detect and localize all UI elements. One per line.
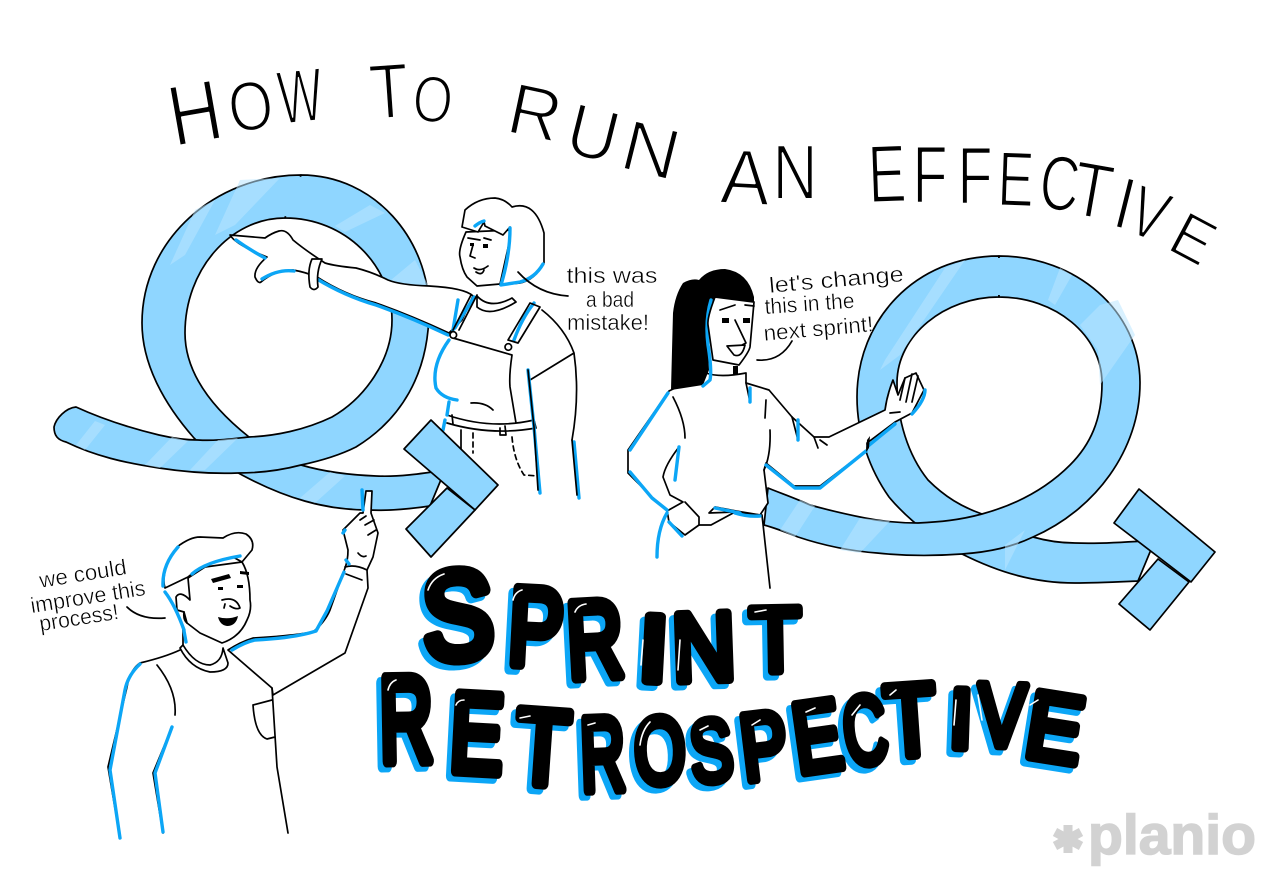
strap buttons <box>450 332 512 350</box>
arrow head upper <box>1114 489 1215 582</box>
icon: asterisk <box>1055 825 1081 853</box>
ribbon highlights <box>780 260 1135 570</box>
bracelet <box>309 259 322 290</box>
hair shadow <box>475 221 543 285</box>
left arrow head <box>404 420 498 557</box>
title: how to run an effective: E <box>1158 198 1228 280</box>
word: retrospective: P <box>734 691 794 801</box>
heading gloss highlights <box>388 574 1038 745</box>
title: how to run an effective: F <box>957 130 993 221</box>
arrow head upper <box>404 420 498 510</box>
fingers <box>890 374 918 413</box>
title: how to run an effective: E <box>996 136 1036 224</box>
figure: woman with long black hair <box>628 269 925 588</box>
title: how to run an effective: F <box>912 129 948 220</box>
word: retrospective: R <box>578 696 627 814</box>
speech: let's change this in the next sprint <box>757 261 905 360</box>
heading: sprint retrospective <box>378 546 1091 814</box>
arrow head lower <box>1119 559 1189 630</box>
collar <box>180 645 228 672</box>
speech: this was a bad mistake: mistake! <box>567 310 649 335</box>
word: retrospective <box>378 652 1091 814</box>
word: sprint: T <box>749 588 802 691</box>
word: retrospective: O <box>632 698 687 805</box>
blue shadows <box>110 490 363 838</box>
body and arm <box>628 373 924 535</box>
figure: woman with overalls pointing <box>230 198 580 498</box>
face features <box>720 305 754 356</box>
head <box>176 562 251 643</box>
speech: we could improve this process: we could <box>36 554 128 593</box>
head <box>460 230 512 286</box>
hair <box>671 269 754 390</box>
body left <box>108 650 288 838</box>
word: retrospective: V <box>976 666 1028 767</box>
clothing lines <box>657 383 827 588</box>
speech: let's change this in the next sprint: let's change <box>768 261 905 298</box>
word: sprint: I <box>636 595 672 702</box>
title: how to run an effective: O <box>223 64 278 148</box>
word: retrospective: R <box>378 652 434 788</box>
figure: man with cap pointing up <box>108 490 378 838</box>
pointing arm <box>230 231 473 333</box>
right loop arrow ribbon <box>764 256 1215 630</box>
ribbon highlights <box>76 178 428 503</box>
ribbon front section and strip <box>54 175 429 473</box>
title: how to run an effective: N <box>613 104 688 197</box>
overall body <box>438 285 580 495</box>
word: retrospective: E <box>786 679 849 795</box>
callout line <box>757 341 792 360</box>
face <box>222 599 240 609</box>
word: retrospective: T <box>512 687 573 809</box>
neck <box>183 612 187 645</box>
title: how to run an effective: E <box>866 127 908 220</box>
planio logo: planio <box>1088 803 1256 866</box>
word: retrospective: T <box>881 662 940 778</box>
wrist cuff <box>866 436 870 452</box>
word: retrospective: S <box>686 701 737 802</box>
word: sprint <box>419 546 802 703</box>
speech: this was a bad mistake: this was <box>566 263 658 288</box>
speech: let's change this in the next sprint: next sprint! <box>762 311 874 346</box>
speech: let's change this in the next sprint: this in the <box>764 288 855 319</box>
title: how to run an effective: W <box>274 53 327 141</box>
body lines <box>447 310 577 450</box>
title: how to run an effective: A <box>718 133 773 223</box>
callout line <box>127 607 165 618</box>
word: sprint: S <box>419 546 497 687</box>
title: how to run an effective: T <box>367 47 412 137</box>
arm shadow <box>236 240 448 335</box>
ribbon seam cover <box>997 258 1001 295</box>
dashed pocket and seam <box>473 433 538 476</box>
eyes <box>470 243 488 248</box>
ribbon back section and tail <box>142 175 445 510</box>
speech: this was a bad mistake <box>518 263 658 335</box>
title: how to run an effective: H <box>161 61 229 165</box>
word: retrospective: E <box>447 669 507 798</box>
title: how to run an effective: T <box>1066 145 1119 238</box>
ribbon seam cover <box>285 177 301 216</box>
title: how to run an effective <box>161 47 1228 280</box>
ribbon front section and strip <box>764 256 1140 555</box>
hair <box>462 198 544 285</box>
speech: we could improve this process <box>29 554 165 636</box>
hair shadow <box>703 300 711 386</box>
title: how to run an effective: N <box>772 128 818 216</box>
raised arm and body <box>228 491 378 695</box>
arrow head lower <box>406 488 475 557</box>
title: how to run an effective: O <box>410 60 456 138</box>
title: how to run an effective: I <box>1106 160 1144 246</box>
speech: we could improve this process: process! <box>37 599 120 636</box>
callout line <box>518 272 568 296</box>
word: retrospective: C <box>837 675 893 786</box>
word: sprint: P <box>505 564 567 690</box>
blue shadows <box>630 388 925 557</box>
word: retrospective: E <box>1019 672 1091 785</box>
collar <box>477 296 516 311</box>
title: how to run an effective: U <box>558 88 627 180</box>
title: how to run an effective: R <box>501 68 569 158</box>
face <box>468 238 491 274</box>
title: how to run an effective: C <box>1036 139 1084 229</box>
blue body shadows <box>435 297 579 498</box>
speech: we could improve this process: improve this <box>29 575 147 618</box>
sleeve cuff <box>345 516 376 580</box>
title: how to run an effective: V <box>1118 169 1181 258</box>
word: sprint: R <box>564 578 626 703</box>
cap <box>164 533 253 588</box>
eyes and collar mark <box>722 318 750 375</box>
overall straps <box>453 295 577 495</box>
word: sprint: N <box>670 592 737 702</box>
left loop ribbon <box>54 175 445 510</box>
word: retrospective: I <box>947 671 975 767</box>
face <box>708 297 754 365</box>
ribbon back section and tail <box>857 256 1155 583</box>
brows, eyes and mouth <box>211 571 249 626</box>
speech: this was a bad mistake: a bad <box>586 287 634 312</box>
